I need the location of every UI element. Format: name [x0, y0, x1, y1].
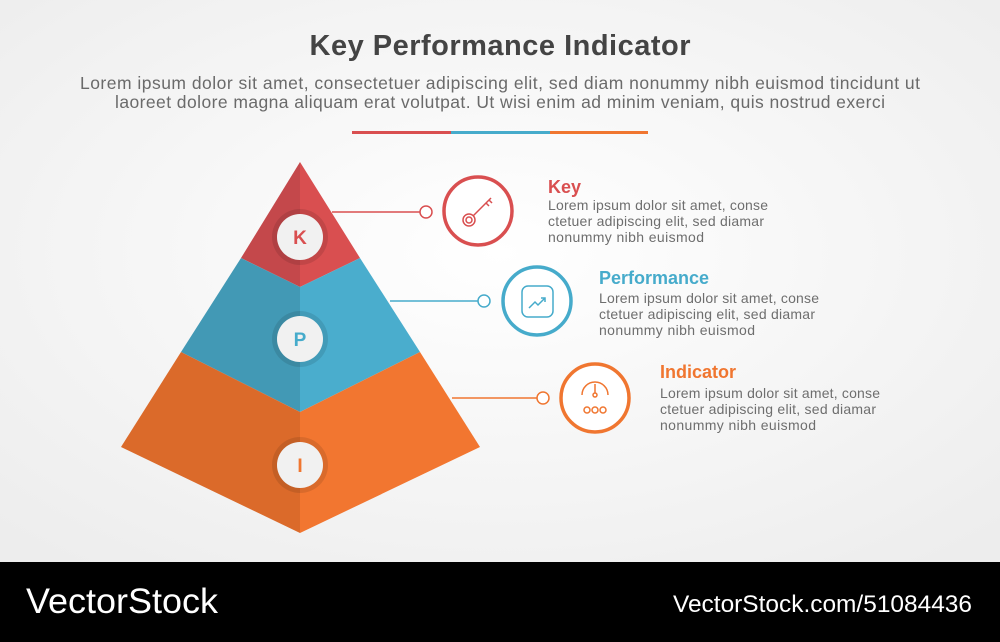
connector K — [332, 206, 432, 218]
pyramid — [121, 162, 480, 533]
letter I — [272, 437, 328, 493]
text: Indicator: Indicator — [660, 362, 736, 382]
subtitle: Lorem ipsum dolor sit amet, consectetuer adipiscing elit, sed diam nonummy nibh euismod tincidunt ut — [80, 73, 920, 93]
text: Indicator: ctetuer adipiscing elit, sed diamar — [660, 401, 876, 417]
text: Key: nonummy nibh euismod — [548, 229, 704, 245]
connector P — [390, 295, 490, 307]
text: Key: Key — [548, 177, 581, 197]
icon: chart — [503, 267, 571, 335]
text: Indicator — [660, 362, 880, 433]
text: Performance: nonummy nibh euismod — [599, 322, 755, 338]
text: Performance: Performance — [599, 268, 709, 288]
letter K — [272, 209, 328, 265]
footer: VectorStock.com/51084436 — [673, 591, 972, 618]
subtitle: laoreet dolore magna aliquam erat volutpat. Ut wisi enim ad minim veniam, quis nostrud exerci — [115, 92, 885, 112]
text: Key: Lorem ipsum dolor sit amet, conse — [548, 197, 768, 213]
footer — [0, 562, 1000, 642]
text: Key — [548, 177, 768, 245]
icon: gauge — [561, 364, 629, 432]
letter P — [272, 311, 328, 367]
title: Key Performance Indicator — [310, 30, 690, 62]
icon: key — [444, 177, 512, 245]
subtitle — [80, 73, 920, 112]
text: Indicator: nonummy nibh euismod — [660, 417, 816, 433]
letter K: K — [293, 228, 307, 249]
divider — [352, 131, 648, 134]
connector I — [452, 392, 549, 404]
text: Indicator: Lorem ipsum dolor sit amet, conse — [660, 385, 880, 401]
text: Performance: ctetuer adipiscing elit, sed diamar — [599, 306, 815, 322]
footer: VectorStock — [26, 582, 219, 621]
letter I: I — [297, 456, 303, 477]
text: Performance — [599, 268, 819, 338]
letter P: P — [294, 330, 307, 351]
text: Key: ctetuer adipiscing elit, sed diamar — [548, 213, 764, 229]
text: Performance: Lorem ipsum dolor sit amet, conse — [599, 290, 819, 306]
